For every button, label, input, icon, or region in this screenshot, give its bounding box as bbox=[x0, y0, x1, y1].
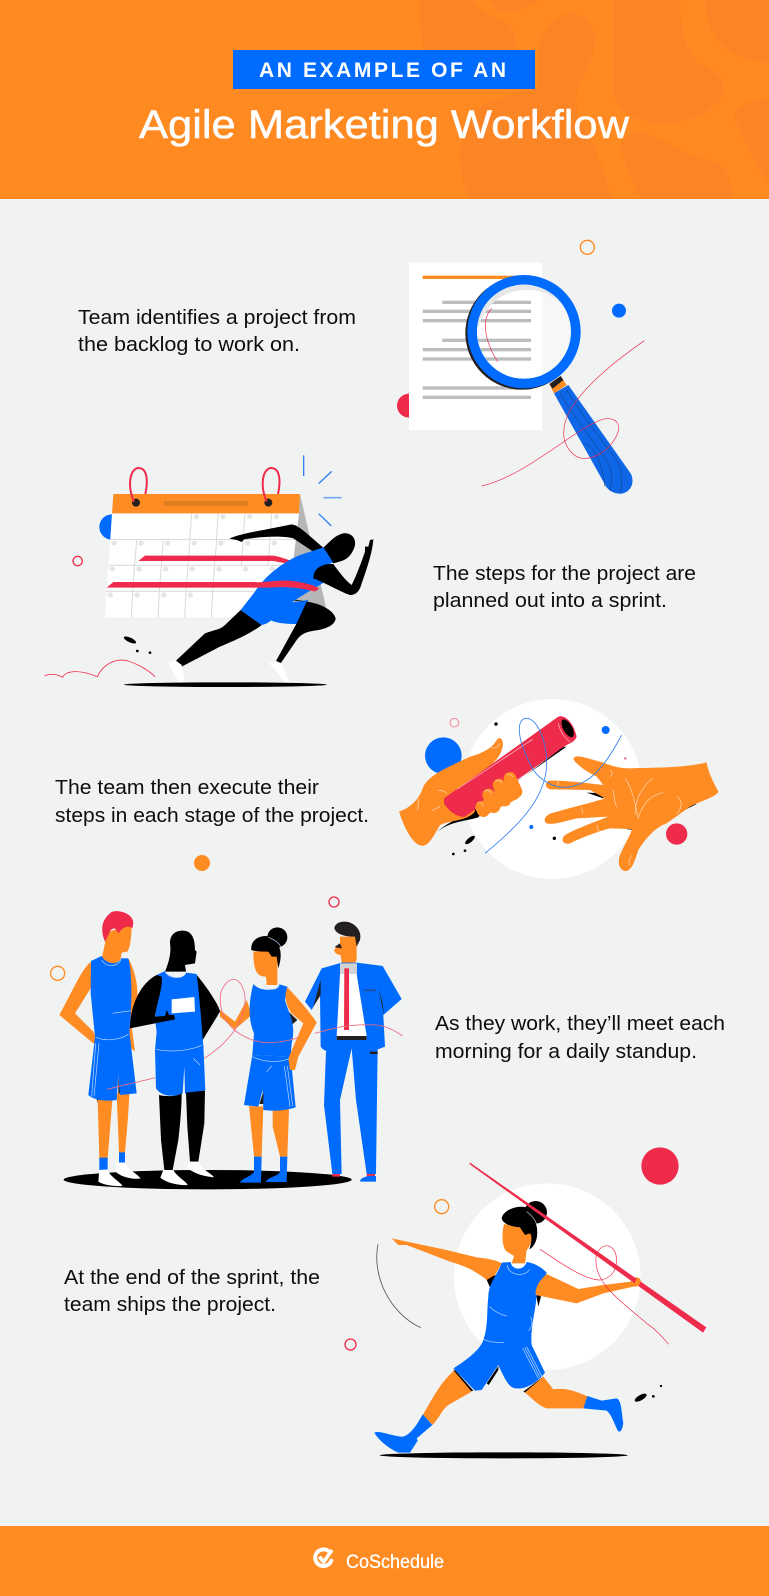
step 4 text bbox=[435, 1012, 725, 1063]
illustration: magnifying glass over document bbox=[397, 240, 644, 494]
step 2 text bbox=[433, 562, 696, 612]
header band bbox=[0, 0, 769, 199]
illustration: baton handoff between hands bbox=[399, 699, 718, 879]
step 1 text: the backlog to work on. bbox=[78, 333, 300, 356]
title: Agile Marketing Workflow bbox=[139, 103, 629, 147]
orange dot bbox=[194, 855, 210, 871]
illustration: team standup bbox=[51, 897, 403, 1189]
step 3 text: steps in each stage of the project. bbox=[55, 804, 369, 827]
small red ring bbox=[345, 1339, 356, 1350]
step 4 text: As they work, they’ll meet each bbox=[435, 1012, 725, 1035]
step 2 text: planned out into a sprint. bbox=[433, 589, 667, 612]
illustration: javelin thrower bbox=[374, 1147, 706, 1458]
person: red-haired runner bbox=[59, 911, 141, 1186]
person: dark-skinned runner with bib bbox=[130, 931, 220, 1185]
label box: an example of an: AN EXAMPLE OF AN bbox=[259, 59, 506, 82]
logo: CoSchedule bbox=[315, 1549, 444, 1573]
step 5 text: At the end of the sprint, the bbox=[64, 1266, 320, 1289]
step 4 text: morning for a daily standup. bbox=[435, 1040, 697, 1063]
step 5 text: team ships the project. bbox=[64, 1293, 276, 1316]
illustration: sprinter and calendar bbox=[45, 455, 373, 687]
person: man in blue suit bbox=[305, 922, 402, 1182]
label box: an example of an bbox=[233, 50, 535, 89]
logo: CoSchedule: CoSchedule bbox=[346, 1551, 444, 1573]
footer band bbox=[0, 1526, 769, 1596]
step 1 text bbox=[78, 306, 356, 356]
step 1 text: Team identifies a project from bbox=[78, 306, 356, 329]
step 3 text bbox=[55, 776, 369, 827]
person: woman with hair bun bbox=[220, 927, 317, 1183]
step 5 text bbox=[64, 1266, 320, 1316]
step 2 text: The steps for the project are bbox=[433, 562, 696, 585]
step 3 text: The team then execute their bbox=[55, 776, 319, 799]
